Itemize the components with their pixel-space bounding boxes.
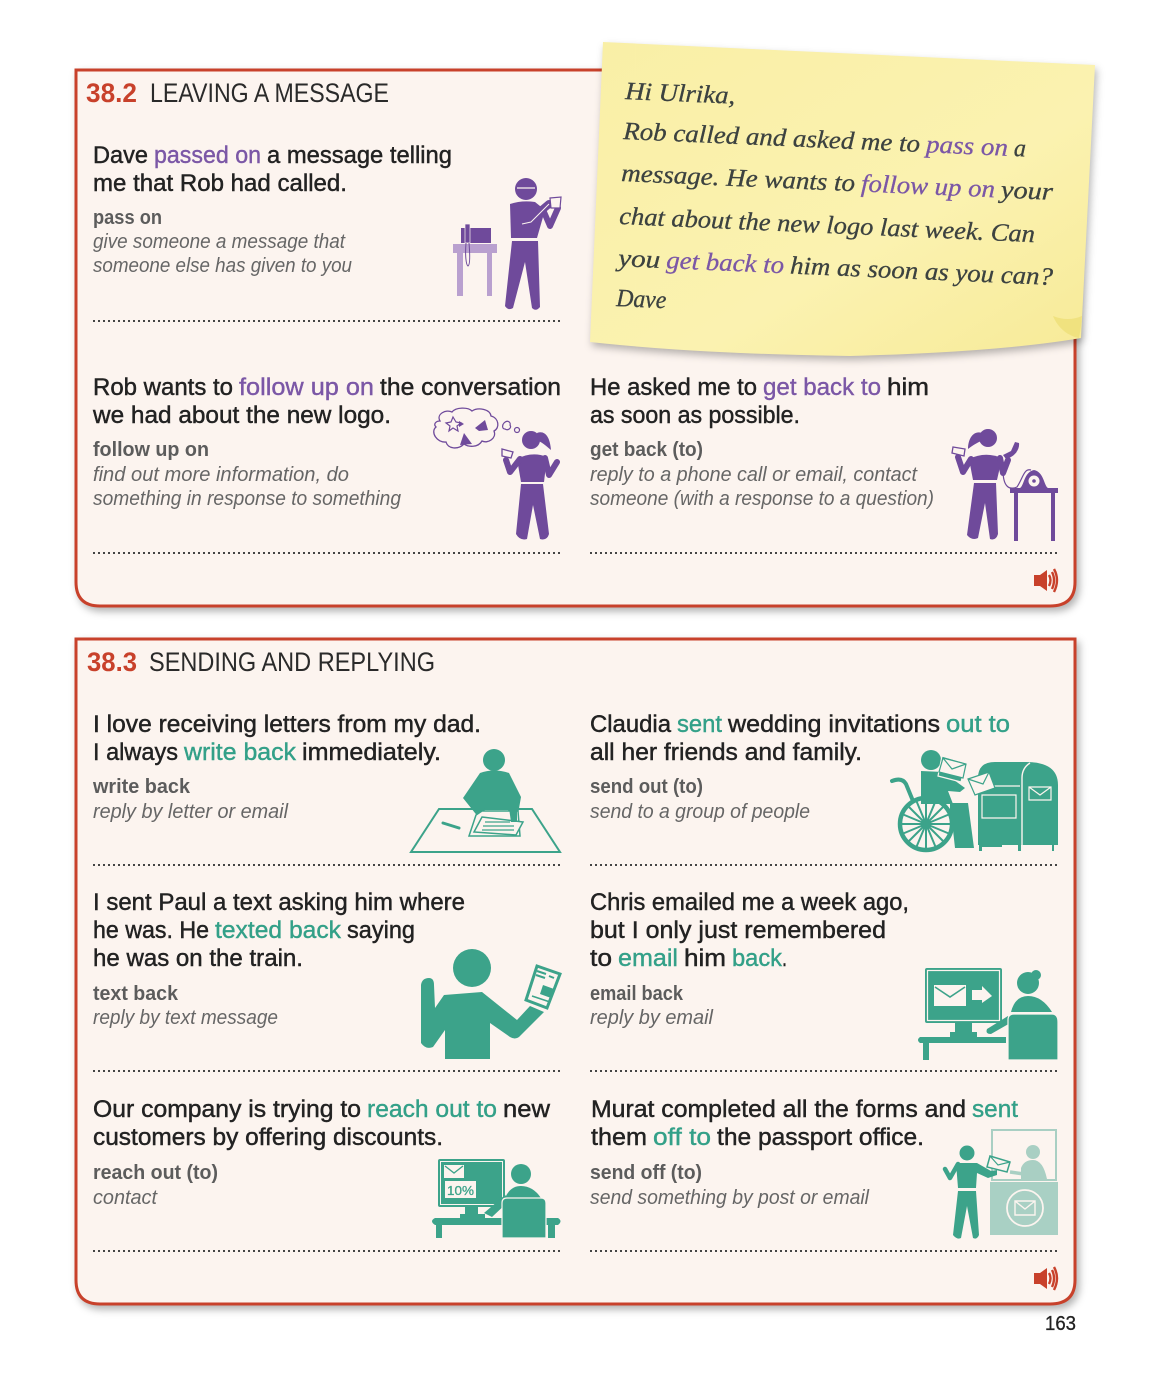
entry: pass on: me that Rob had called. bbox=[93, 170, 347, 197]
entry: text back: saying bbox=[347, 917, 415, 944]
icon: person at computer with 10% offer bbox=[432, 1159, 560, 1238]
icon: person reading message beside desk phone bbox=[453, 178, 561, 310]
heading: 38.2 bbox=[86, 78, 389, 108]
note line 4: get back to bbox=[666, 247, 785, 279]
entry: send out to bbox=[590, 711, 1010, 823]
entry: write back: I love receiving letters from my dad. bbox=[93, 711, 481, 738]
note line 2 bbox=[621, 160, 1054, 206]
entry: get back to: reply to a phone call or email, contact bbox=[590, 464, 918, 486]
heading: 38.2: 38.2 bbox=[86, 78, 137, 108]
entry: pass on: pass on bbox=[93, 207, 162, 229]
entry: text back: reply by text message bbox=[93, 1007, 278, 1029]
note line 4: him as soon as you can? bbox=[790, 253, 1054, 291]
entry: follow up on: follow up on bbox=[239, 374, 374, 401]
heading: 38.2: LEAVING A MESSAGE bbox=[150, 78, 389, 108]
entry: email back: . bbox=[782, 945, 787, 972]
sticky note bbox=[590, 42, 1095, 356]
dotted rule bbox=[93, 1070, 562, 1072]
entry: pass on: passed on bbox=[154, 142, 261, 169]
note line 4: you bbox=[614, 245, 661, 274]
dotted rule bbox=[93, 864, 562, 866]
entry: follow up on: follow up on bbox=[93, 439, 209, 461]
entry: send out to: Claudia bbox=[590, 711, 672, 738]
entry: reach out to: new bbox=[503, 1096, 551, 1123]
entry: write back: reply by letter or email bbox=[93, 801, 289, 823]
dotted rule bbox=[590, 1070, 1059, 1072]
entry: send off to: send off (to) bbox=[590, 1162, 702, 1184]
entry: email back: reply by email bbox=[590, 1007, 714, 1029]
entry: email back: email back bbox=[590, 983, 684, 1005]
entry: email back: back bbox=[732, 945, 783, 972]
dotted rule bbox=[93, 1250, 562, 1252]
entry: send out to: send to a group of people bbox=[590, 801, 810, 823]
entry: text back: text back bbox=[93, 983, 179, 1005]
entry: get back to: get back (to) bbox=[590, 439, 703, 461]
entry: email back bbox=[590, 889, 909, 1029]
entry: pass on bbox=[93, 142, 452, 277]
entry: text back: texted back bbox=[215, 917, 342, 944]
entry: follow up on bbox=[92, 374, 561, 510]
dotted rule bbox=[590, 1250, 1059, 1252]
entry: write back: write back bbox=[92, 776, 191, 798]
entry: reach out to: Our company is trying to bbox=[93, 1096, 361, 1123]
entry: text back: he was. He bbox=[93, 917, 209, 944]
entry: send off to: send something by post or email bbox=[590, 1187, 870, 1209]
panel background bbox=[76, 639, 1075, 1304]
heading: 38.3: 38.3 bbox=[87, 647, 137, 677]
entry: get back to: someone (with a response to a question) bbox=[590, 488, 934, 510]
panel background bbox=[76, 70, 1075, 606]
entry: reach out to: reach out (to) bbox=[93, 1162, 218, 1184]
entry: text back: he was on the train. bbox=[93, 945, 303, 972]
heading: 38.3: SENDING AND REPLYING bbox=[149, 647, 435, 677]
note line 4 bbox=[614, 245, 1054, 291]
entry: send off to: Murat completed all the forms and bbox=[591, 1096, 966, 1123]
entry: send off to: sent bbox=[972, 1096, 1018, 1123]
entry: send off to: the passport office. bbox=[717, 1124, 924, 1151]
entry: send out to: send out (to) bbox=[590, 776, 703, 798]
entry: email back: him bbox=[684, 945, 726, 972]
note corner curl bbox=[1053, 316, 1082, 338]
note line 1 bbox=[622, 118, 1027, 163]
icon: person at computer with 10% offer: 10% bbox=[447, 1183, 474, 1198]
note paper bbox=[590, 42, 1095, 356]
entry: write back: write back bbox=[183, 739, 297, 766]
entry: text back: I sent Paul a text asking him where bbox=[93, 889, 465, 916]
note signature: Dave bbox=[615, 285, 667, 314]
icon: person in wheelchair posting letters bbox=[892, 750, 1058, 851]
dotted rule bbox=[590, 552, 1059, 554]
icon: person emailing at computer bbox=[918, 968, 1058, 1060]
entry: get back to: get back to bbox=[763, 374, 881, 401]
entry: write back bbox=[92, 711, 481, 823]
entry: get back to: as soon as possible. bbox=[590, 402, 800, 429]
dotted rule bbox=[590, 864, 1059, 866]
entry: follow up on: something in response to something bbox=[93, 488, 401, 510]
entry: send off to: them bbox=[591, 1124, 647, 1151]
icon: person handing letter to clerk at post office counter bbox=[945, 1130, 1058, 1239]
entry: pass on: Dave bbox=[93, 142, 148, 169]
entry: reach out to: customers by offering discounts. bbox=[93, 1124, 443, 1151]
entry: send off to bbox=[590, 1096, 1018, 1209]
entry: follow up on: find out more information, do bbox=[93, 464, 349, 486]
entry: follow up on: we had about the new logo. bbox=[92, 402, 391, 429]
dotted rule bbox=[93, 552, 562, 554]
entry: write back: I always bbox=[93, 739, 178, 766]
entry: get back to: He asked me to bbox=[590, 374, 757, 401]
note line 1: pass on bbox=[923, 131, 1009, 162]
dotted rule bbox=[93, 320, 562, 322]
entry: email back: Chris emailed me a week ago, bbox=[590, 889, 909, 916]
entry: email back: to bbox=[590, 945, 612, 972]
entry: email back: but I only just remembered bbox=[590, 917, 886, 944]
entry: pass on: a message telling bbox=[267, 142, 452, 169]
entry: get back to: him bbox=[887, 374, 929, 401]
icon: person thinking about message bbox=[434, 408, 557, 539]
panel: 38.2 leaving a message bbox=[76, 70, 1075, 606]
entry: send out to: all her friends and family. bbox=[590, 739, 862, 766]
entry: text back bbox=[93, 889, 465, 1029]
note line 2: your bbox=[997, 176, 1054, 206]
icon: audio speaker bbox=[1034, 569, 1057, 592]
note line 2: follow up on bbox=[861, 170, 996, 203]
note line 1: a bbox=[1013, 135, 1027, 163]
entry: get back to bbox=[590, 374, 934, 510]
entry: follow up on: Rob wants to bbox=[93, 374, 233, 401]
entry: reach out to: reach out to bbox=[367, 1096, 497, 1123]
icon: audio speaker bbox=[1034, 1267, 1057, 1290]
icon: person holding phone bbox=[421, 949, 560, 1059]
icon: person writing at desk bbox=[411, 749, 560, 852]
entry: follow up on: the conversation bbox=[380, 374, 561, 401]
entry: send out to: out to bbox=[946, 711, 1010, 738]
entry: reach out to bbox=[93, 1096, 551, 1209]
entry: write back: immediately. bbox=[302, 739, 441, 766]
note line 2: message. He wants to bbox=[621, 160, 856, 197]
entry: send off to: off to bbox=[653, 1124, 711, 1151]
note line 3: chat about the new logo last week. Can bbox=[619, 203, 1036, 248]
panel: 38.3 sending and replying bbox=[76, 639, 1075, 1304]
entry: send out to: sent bbox=[677, 711, 722, 738]
icon: person on phone at table bbox=[952, 429, 1058, 541]
entry: pass on: someone else has given to you bbox=[93, 255, 352, 277]
entry: pass on: give someone a message that bbox=[93, 231, 346, 253]
entry: reach out to: contact bbox=[93, 1187, 158, 1209]
entry: send out to: wedding invitations bbox=[727, 711, 940, 738]
page number: 163 bbox=[1045, 1313, 1076, 1335]
note line 1: Rob called and asked me to bbox=[622, 118, 921, 158]
note salutation: Hi Ulrika, bbox=[624, 78, 736, 110]
entry: email back: email bbox=[618, 945, 678, 972]
